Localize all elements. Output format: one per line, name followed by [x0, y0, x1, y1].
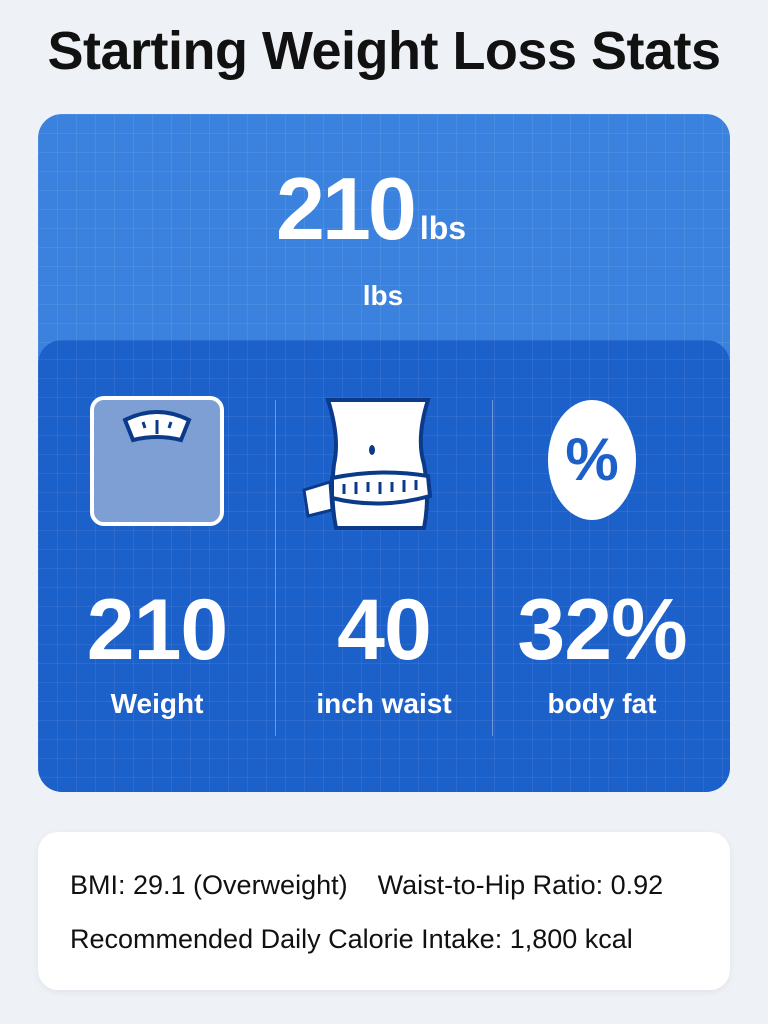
icon: scale — [90, 396, 224, 526]
text: BMI and ratio: BMI: 29.1 (Overweight) Waist-to-Hip Ratio: 0.92 — [70, 870, 663, 900]
big number 210 lbs: 210lbs — [276, 159, 466, 258]
icon: percent — [548, 400, 636, 520]
metric: body fat: 32% — [517, 582, 687, 678]
icon: waist tape — [302, 398, 432, 530]
metric: weight: 210 — [87, 582, 227, 678]
title: Starting Weight Loss Stats — [47, 21, 721, 81]
secondary lbs label: lbs — [363, 280, 403, 311]
metric: waist: 40 — [337, 582, 431, 678]
panel: main stats — [38, 114, 730, 792]
panel: inner metrics — [38, 340, 730, 792]
metric: weight: Weight — [111, 688, 203, 719]
metric: waist — [316, 582, 452, 719]
icon: percent: % — [565, 426, 619, 493]
panel: summary card — [38, 832, 730, 990]
text: calories: Recommended Daily Calorie Intake: 1,800 kcal — [70, 924, 633, 954]
metric: waist: inch waist — [316, 688, 452, 719]
metric: body fat: body fat — [548, 688, 656, 719]
